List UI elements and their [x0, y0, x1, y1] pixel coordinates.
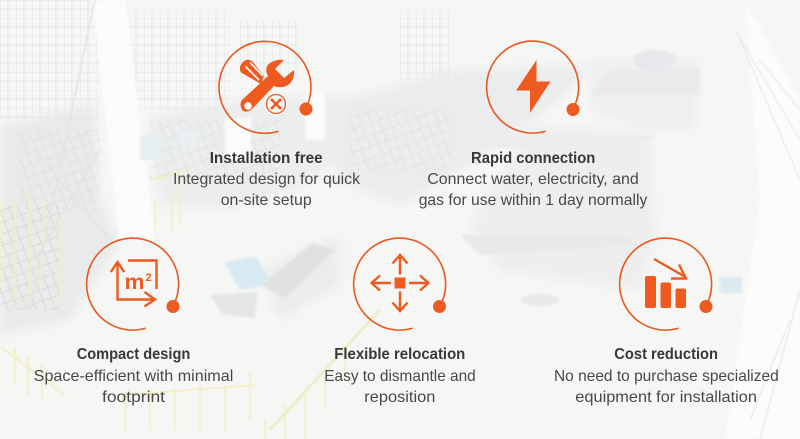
description: Rapid connection — [419, 171, 647, 209]
heading: Flexible relocation: Flexible relocation — [334, 346, 465, 363]
feature: Compact design — [34, 238, 233, 406]
feature: Cost reduction — [554, 238, 779, 406]
description: Cost reduction: equipment for installation — [575, 389, 757, 406]
icon: square metre ring — [87, 238, 180, 330]
description: Compact design: footprint — [102, 389, 166, 406]
description: Flexible relocation: Easy to dismantle and — [324, 368, 476, 385]
description: Flexible relocation: reposition — [364, 389, 435, 406]
feature: Flexible relocation — [324, 238, 476, 406]
description: Compact design — [34, 368, 233, 406]
description: Cost reduction: No need to purchase specialized — [554, 368, 779, 385]
description: Flexible relocation — [324, 368, 476, 406]
icon: falling bar chart ring — [620, 238, 712, 330]
feature: Rapid connection — [419, 41, 647, 209]
description: Installation free: Integrated design for quick — [173, 171, 361, 188]
description: Cost reduction — [554, 368, 779, 406]
feature: Installation free — [173, 41, 361, 209]
icon: square metre ring: m — [124, 271, 144, 294]
description: Installation free: on-site setup — [221, 192, 312, 209]
description: Rapid connection: Connect water, electricity, and — [427, 171, 639, 188]
description: Compact design: Space-efficient with minimal — [34, 368, 233, 385]
icon: four-way arrows ring — [354, 238, 446, 330]
description: Rapid connection: gas for use within 1 day normally — [419, 192, 647, 209]
heading: Rapid connection: Rapid connection — [471, 150, 595, 167]
icon: wrench and screwdriver ring — [219, 41, 312, 133]
heading: Compact design: Compact design — [77, 346, 190, 363]
icon: lightning bolt ring — [487, 41, 580, 133]
description: Installation free — [173, 171, 361, 209]
icon: square metre ring: 2 — [146, 272, 152, 284]
heading: Installation free: Installation free — [210, 150, 323, 167]
heading: Cost reduction: Cost reduction — [614, 346, 718, 363]
